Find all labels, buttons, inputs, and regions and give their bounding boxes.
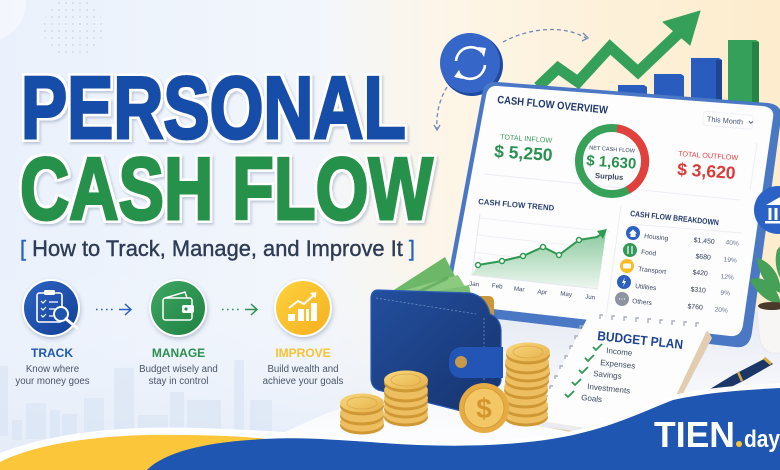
row: transport: 12% [720, 273, 734, 282]
description: track: Know where [26, 364, 79, 375]
table surface [275, 312, 780, 470]
icon: rising bars [274, 279, 332, 337]
bottom wave: blue [147, 388, 780, 470]
row: housing: Housing [644, 233, 669, 243]
label: MANAGE: MANAGE [152, 346, 205, 360]
plant soil [758, 302, 780, 310]
trend chart: Apr [537, 289, 547, 296]
row: housing: $1,450 [693, 237, 715, 246]
summary card outline [484, 143, 757, 200]
dashed arc arrows [434, 29, 588, 130]
notebook: budget plan [530, 315, 712, 434]
lower left tint [0, 270, 440, 470]
total inflow: TOTAL INFLOW [500, 132, 553, 145]
trend chart: CASH FLOW TREND [478, 197, 555, 213]
label: TRACK: TRACK [31, 346, 73, 360]
total outflow: $ 3,620 [677, 159, 737, 183]
step: manage [139, 279, 218, 387]
row: others: $760 [687, 303, 703, 312]
dashboard heading: CASH FLOW OVERVIEW [497, 94, 609, 117]
arrow: manage to improve [222, 304, 257, 315]
icon: pen [705, 358, 773, 392]
icon: clipboard and magnifier [22, 279, 80, 337]
row: transport: Transport [638, 266, 667, 276]
description: improve: Build wealth and [267, 364, 339, 375]
row: transport [620, 259, 734, 282]
description: track: your money goes [15, 376, 90, 387]
row: transport: $420 [692, 269, 708, 278]
step: improve [263, 279, 344, 387]
coin stack: left [340, 394, 384, 434]
cash notes [383, 257, 456, 302]
label: IMPROVE: IMPROVE [275, 346, 331, 360]
wallet clasp [449, 347, 503, 378]
logo: TIEN.day: TIEN [654, 414, 735, 455]
icon: wallet [149, 279, 207, 337]
dot pattern decoration [43, 0, 103, 58]
city skyline [0, 360, 272, 440]
bottom wave: white band [0, 383, 780, 470]
row: others: Others [632, 298, 653, 307]
trend chart: Feb [491, 282, 503, 291]
checkmarks [565, 344, 602, 397]
plant [750, 245, 780, 353]
title line: PERSONAL: PERSONAL [21, 58, 406, 157]
description: manage: Budget wisely and [139, 364, 218, 375]
notebook heading: BUDGET PLAN [597, 328, 684, 352]
notebook pages [530, 331, 712, 434]
breakdown table: CASH FLOW BREAKDOWN [630, 209, 719, 227]
single dollar coin [459, 383, 509, 433]
donut: net cash flow: $ 1,630 [586, 152, 637, 173]
coin stack: middle [384, 370, 428, 426]
row: utilities: $310 [690, 286, 706, 295]
row: food [623, 243, 737, 265]
trend chart: May [560, 290, 573, 299]
single dollar coin: $ [476, 393, 492, 424]
total inflow: $ 5,250 [494, 141, 554, 165]
bottom wave: yellow [0, 435, 290, 470]
total outflow [677, 149, 739, 183]
row: others [615, 292, 728, 315]
trend chart: Jun [585, 294, 596, 302]
donut: net cash flow: NET CASH FLOW [589, 145, 636, 155]
wallet with cash [371, 257, 503, 411]
trend chart [469, 197, 610, 302]
breakdown table [606, 206, 742, 318]
row: utilities [617, 275, 730, 297]
donut: net cash flow: Surplus [595, 171, 624, 182]
wallet snap [455, 356, 467, 368]
dashboard frame [444, 82, 780, 347]
title line: CASH FLOW: CASH FLOW [20, 140, 434, 238]
dashboard face [449, 86, 773, 336]
checklist: Savings [593, 369, 622, 381]
growth arrow [538, 11, 700, 87]
icon: bank circle [754, 186, 780, 234]
row: food: Food [641, 249, 657, 258]
row: food: 19% [723, 256, 737, 265]
period selector: This Month [707, 114, 743, 127]
checklist: Expenses [600, 358, 636, 371]
bar chart behind dashboard [618, 40, 759, 122]
panel: dashboard [444, 82, 780, 347]
row: utilities: 9% [720, 290, 730, 297]
trend chart: Jan [469, 281, 480, 289]
checklist [581, 346, 636, 404]
row: food: $680 [695, 253, 711, 262]
subtitle: [ How to Track, Manage, and Improve It ] [20, 236, 415, 261]
plant pot [757, 306, 780, 353]
checklist: Income [606, 346, 633, 358]
description: manage: stay in control [149, 376, 208, 387]
icon: sync circle [440, 33, 503, 96]
row: utilities: Utilities [635, 283, 657, 292]
step: track [15, 279, 90, 387]
row: others: 20% [714, 306, 728, 315]
row: housing [626, 226, 739, 248]
description: improve: achieve your goals [263, 376, 344, 387]
trend chart: Mar [513, 285, 525, 294]
corner circle decoration [0, 0, 26, 41]
plant leaves [750, 245, 780, 303]
donut: net cash flow [579, 128, 645, 194]
coins [340, 342, 550, 434]
row: housing: 40% [725, 239, 739, 248]
wallet body [371, 290, 501, 411]
total outflow: TOTAL OUTFLOW [678, 149, 739, 162]
notebook spiral [540, 315, 699, 409]
wallet stitching [376, 298, 484, 380]
checklist: Investments [587, 382, 631, 395]
arrow: track to manage [96, 304, 131, 315]
period selector [702, 111, 754, 129]
coin stack: tall [503, 342, 550, 426]
title: Personal Cash Flow [20, 58, 434, 238]
wallet inner [472, 296, 494, 346]
logo dot [736, 441, 742, 447]
checklist: Goals [581, 393, 603, 404]
